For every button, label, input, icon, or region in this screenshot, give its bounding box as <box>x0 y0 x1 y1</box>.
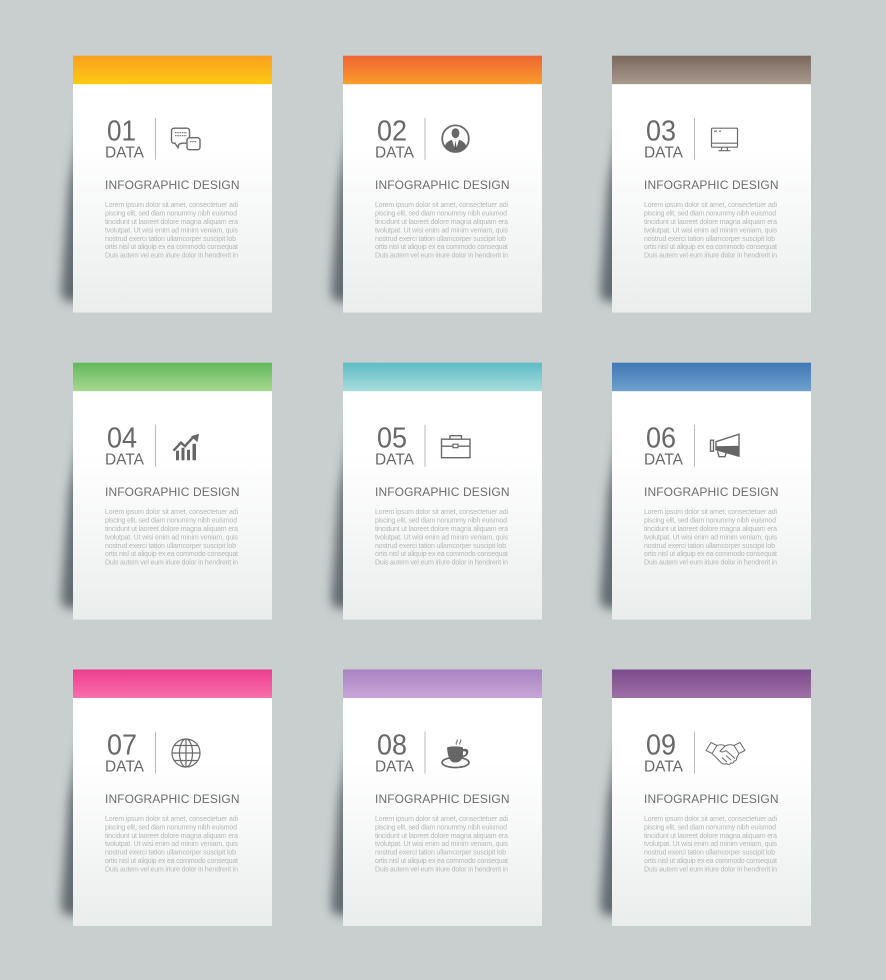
text block: tvolutpat. Ut wisi enim ad minim veniam, quis <box>644 227 778 234</box>
panel: card 01: DATA <box>105 145 144 162</box>
text block: nostrud exerci tation ullamcorper suscipit lob <box>644 543 775 550</box>
icon: coffee cup <box>442 740 469 768</box>
panel: card 03: DATA <box>644 145 683 162</box>
text block: piscing elit, sed diam nonummy nibh euismod <box>105 518 237 525</box>
icon: chat bubbles <box>172 128 200 150</box>
icon: handshake <box>706 742 745 764</box>
text block: ortis nisl ut aliquip ex ea commodo consequat <box>644 244 777 251</box>
text block: piscing elit, sed diam nonummy nibh euismod <box>105 824 237 831</box>
text block: tvolutpat. Ut wisi enim ad minim veniam, quis <box>105 534 238 541</box>
text block: nostrud exerci tation ullamcorper suscipit lob <box>375 850 506 857</box>
text block: tincidunt ut laoreet dolore magna aliquam era <box>375 219 508 226</box>
panel: card 04 <box>61 363 272 620</box>
text block <box>644 202 778 260</box>
panel: card 08: 08 <box>377 730 407 762</box>
panel: card 01 <box>61 56 272 312</box>
text block: Lorem ipsum dolor sit amet, consectetuer adi <box>644 816 777 823</box>
panel: card 07 <box>61 670 272 926</box>
text block: ortis nisl ut aliquip ex ea commodo consequat <box>375 858 508 865</box>
text block: nostrud exerci tation ullamcorper suscipit lob <box>375 543 506 550</box>
text block: ortis nisl ut aliquip ex ea commodo consequat <box>105 244 238 251</box>
text block: Lorem ipsum dolor sit amet, consectetuer adi <box>375 202 508 209</box>
text block: ortis nisl ut aliquip ex ea commodo consequat <box>105 551 238 558</box>
icon: monitor <box>712 128 738 151</box>
text block: piscing elit, sed diam nonummy nibh euismod <box>105 211 237 218</box>
icon: growth chart <box>174 434 199 460</box>
text block: tvolutpat. Ut wisi enim ad minim veniam, quis <box>375 227 508 234</box>
text block: tvolutpat. Ut wisi enim ad minim veniam, quis <box>375 841 508 848</box>
panel: card 04: 04 <box>107 423 137 455</box>
text block: tincidunt ut laoreet dolore magna aliquam era <box>105 219 238 226</box>
text block <box>105 816 238 873</box>
icon: globe <box>172 739 200 767</box>
text block: tvolutpat. Ut wisi enim ad minim veniam, quis <box>644 534 778 541</box>
icon: businessman <box>442 125 469 152</box>
text block: Duis autem vel eum iriure dolor in hendrerit in <box>375 866 508 873</box>
heading: INFOGRAPHIC DESIGN <box>105 792 240 806</box>
text block <box>105 509 238 567</box>
text block: tvolutpat. Ut wisi enim ad minim veniam, quis <box>105 227 238 234</box>
panel: card 02: DATA <box>375 145 414 162</box>
text block <box>375 202 508 260</box>
text block: tincidunt ut laoreet dolore magna aliquam era <box>105 833 238 840</box>
text block: Duis autem vel eum iriure dolor in hendrerit in <box>105 560 238 567</box>
heading: INFOGRAPHIC DESIGN <box>375 178 510 192</box>
panel: card 05 <box>331 363 542 620</box>
text block: piscing elit, sed diam nonummy nibh euismod <box>375 211 507 218</box>
text block: Lorem ipsum dolor sit amet, consectetuer adi <box>105 202 238 209</box>
panel: card 05: DATA <box>375 452 414 469</box>
panel: card 08 <box>331 670 542 926</box>
text block: tincidunt ut laoreet dolore magna aliquam era <box>644 833 777 840</box>
heading: INFOGRAPHIC DESIGN <box>105 178 240 192</box>
text block: nostrud exerci tation ullamcorper suscipit lob <box>105 543 236 550</box>
text block: piscing elit, sed diam nonummy nibh euismod <box>375 518 507 525</box>
text block: piscing elit, sed diam nonummy nibh euismod <box>644 211 776 218</box>
text block: tvolutpat. Ut wisi enim ad minim veniam, quis <box>105 841 238 848</box>
icon: briefcase <box>442 436 470 458</box>
text block <box>375 816 508 873</box>
panel: card 05: 05 <box>377 423 407 455</box>
text block: nostrud exerci tation ullamcorper suscipit lob <box>105 236 236 243</box>
panel: card 03: 03 <box>646 116 676 148</box>
text block: tvolutpat. Ut wisi enim ad minim veniam, quis <box>644 841 778 848</box>
text block: nostrud exerci tation ullamcorper suscipit lob <box>375 236 506 243</box>
text block <box>644 509 778 567</box>
text block <box>644 816 778 873</box>
text block: Lorem ipsum dolor sit amet, consectetuer adi <box>644 509 777 516</box>
heading: INFOGRAPHIC DESIGN <box>105 485 240 499</box>
text block: tincidunt ut laoreet dolore magna aliquam era <box>644 526 777 533</box>
text block: nostrud exerci tation ullamcorper suscipit lob <box>105 850 236 857</box>
heading: INFOGRAPHIC DESIGN <box>644 485 778 499</box>
text block: Duis autem vel eum iriure dolor in hendrerit in <box>105 253 238 260</box>
heading: INFOGRAPHIC DESIGN <box>375 792 510 806</box>
panel: card 09 <box>600 670 811 926</box>
text block: tincidunt ut laoreet dolore magna aliquam era <box>375 526 508 533</box>
text block: Duis autem vel eum iriure dolor in hendrerit in <box>375 560 508 567</box>
panel: card 02 <box>331 56 542 312</box>
panel: card 04: DATA <box>105 452 144 469</box>
panel: card 02: 02 <box>377 116 407 148</box>
text block: Lorem ipsum dolor sit amet, consectetuer adi <box>644 202 777 209</box>
text block <box>105 202 238 260</box>
text block: tincidunt ut laoreet dolore magna aliquam era <box>105 526 238 533</box>
text block: Lorem ipsum dolor sit amet, consectetuer adi <box>105 816 238 823</box>
text block: tincidunt ut laoreet dolore magna aliquam era <box>644 219 777 226</box>
panel: card 01: 01 <box>107 116 136 148</box>
text block: nostrud exerci tation ullamcorper suscipit lob <box>644 850 775 857</box>
panel: card 07: 07 <box>107 730 137 762</box>
panel: card 06 <box>600 363 811 620</box>
panel: card 06: DATA <box>644 452 683 469</box>
panel: card 09: DATA <box>644 758 683 776</box>
panel: card 07: DATA <box>105 758 144 776</box>
text block: ortis nisl ut aliquip ex ea commodo consequat <box>644 551 777 558</box>
text block: Lorem ipsum dolor sit amet, consectetuer adi <box>375 816 508 823</box>
heading: INFOGRAPHIC DESIGN <box>375 485 510 499</box>
text block: Duis autem vel eum iriure dolor in hendrerit in <box>644 253 777 260</box>
panel: card 06: 06 <box>646 423 676 455</box>
text block: piscing elit, sed diam nonummy nibh euismod <box>644 824 776 831</box>
text block: Duis autem vel eum iriure dolor in hendrerit in <box>375 253 508 260</box>
text block: nostrud exerci tation ullamcorper suscipit lob <box>644 236 775 243</box>
text block: ortis nisl ut aliquip ex ea commodo consequat <box>644 858 777 865</box>
text block: tincidunt ut laoreet dolore magna aliquam era <box>375 833 508 840</box>
text block: piscing elit, sed diam nonummy nibh euismod <box>644 518 776 525</box>
text block: ortis nisl ut aliquip ex ea commodo consequat <box>105 858 238 865</box>
text block: ortis nisl ut aliquip ex ea commodo consequat <box>375 244 508 251</box>
panel: card 09: 09 <box>646 730 676 762</box>
text block: tvolutpat. Ut wisi enim ad minim veniam, quis <box>375 534 508 541</box>
text block: Lorem ipsum dolor sit amet, consectetuer adi <box>105 509 238 516</box>
text block: Duis autem vel eum iriure dolor in hendrerit in <box>644 866 777 873</box>
text block: ortis nisl ut aliquip ex ea commodo consequat <box>375 551 508 558</box>
icon: megaphone <box>710 434 739 457</box>
heading: INFOGRAPHIC DESIGN <box>644 792 778 806</box>
heading: INFOGRAPHIC DESIGN <box>644 178 778 192</box>
text block <box>375 509 508 567</box>
text block: piscing elit, sed diam nonummy nibh euismod <box>375 824 507 831</box>
text block: Duis autem vel eum iriure dolor in hendrerit in <box>105 866 238 873</box>
panel: card 03 <box>600 56 811 312</box>
text block: Lorem ipsum dolor sit amet, consectetuer adi <box>375 509 508 516</box>
panel: card 08: DATA <box>375 758 414 776</box>
text block: Duis autem vel eum iriure dolor in hendrerit in <box>644 560 777 567</box>
